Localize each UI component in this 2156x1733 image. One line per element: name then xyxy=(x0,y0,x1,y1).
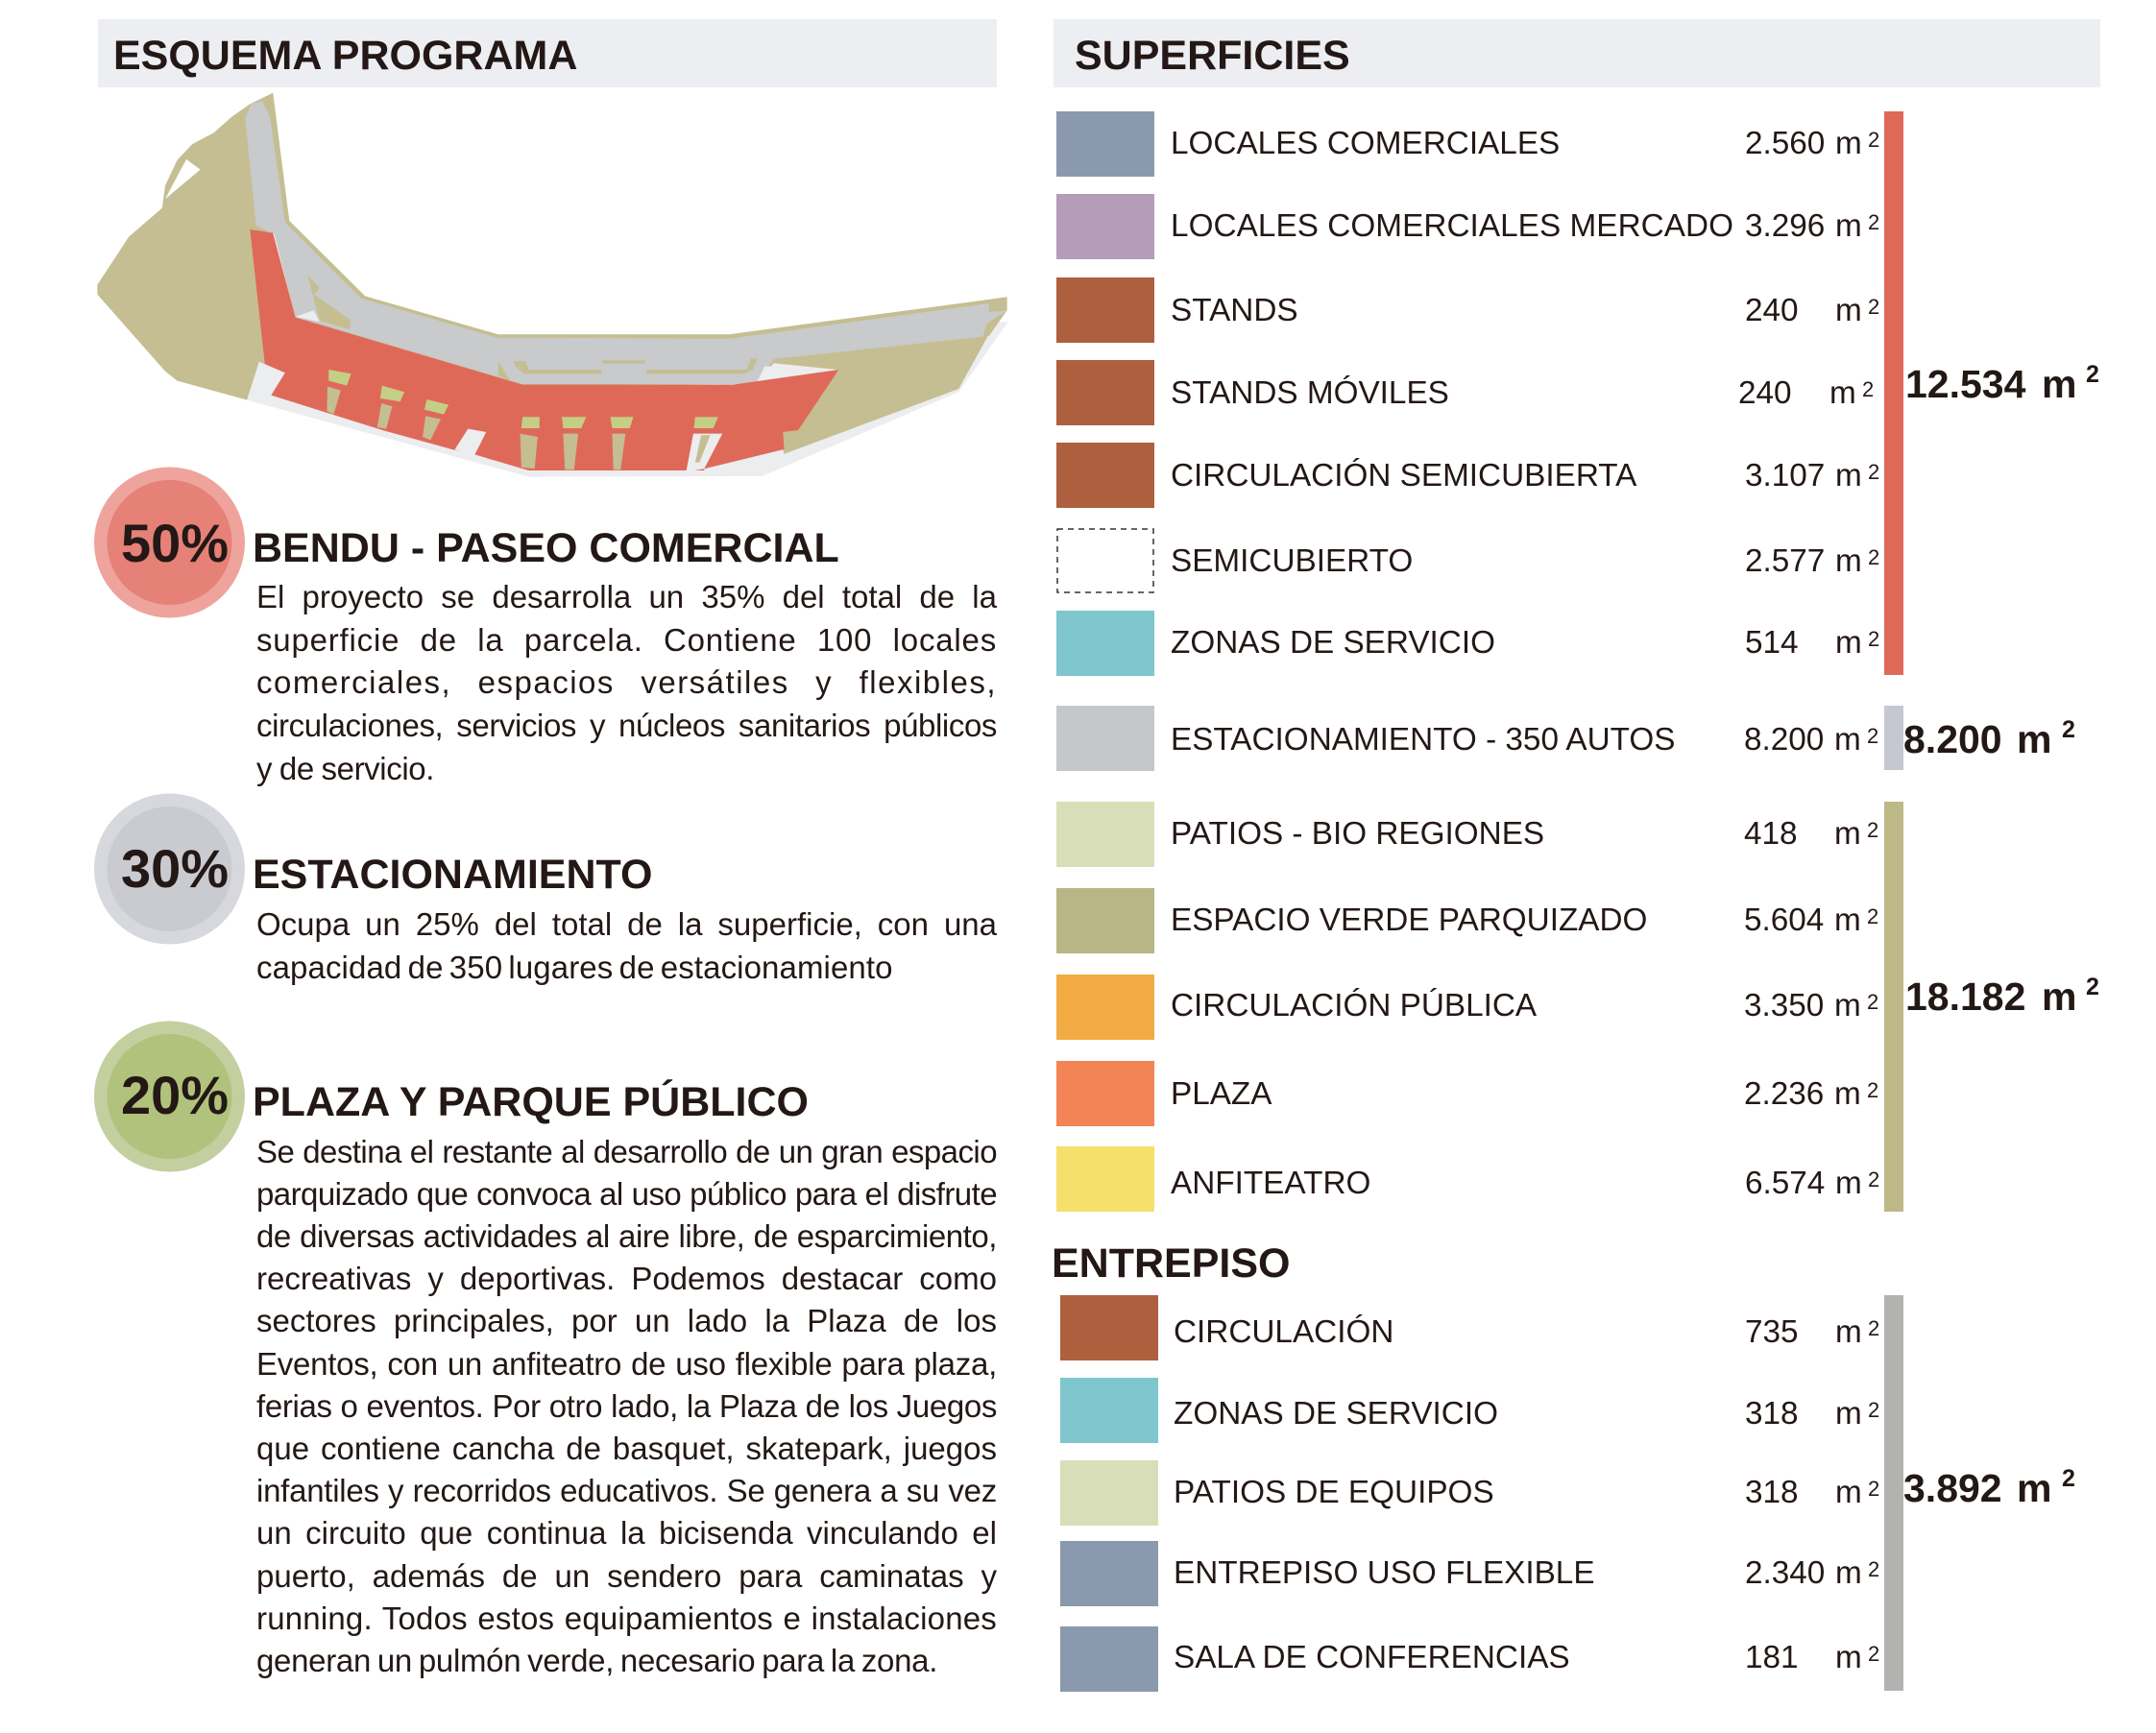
swatch: circulacion semicubierta: m xyxy=(1835,458,1862,493)
swatch: circulacion entrepiso: 735 xyxy=(1745,1314,1799,1350)
swatch: zonas de servicio entrepiso xyxy=(1060,1378,1879,1443)
text: plaza description: running. Todos estos equipamientos e instalaciones xyxy=(256,1601,997,1636)
swatch: circulacion publica xyxy=(1056,975,1878,1040)
swatch: stands moviles: STANDS MÓVILES xyxy=(1171,374,1449,411)
swatch: patios de equipos: PATIOS DE EQUIPOS xyxy=(1174,1475,1494,1510)
swatch: circulacion publica: m xyxy=(1834,988,1861,1023)
text: bendu description: circulaciones, servicios y núcleos sanitarios públicos xyxy=(256,708,997,743)
badge: 50% xyxy=(94,467,245,618)
badge: 50%: 50% xyxy=(121,513,229,573)
swatch: circulacion entrepiso xyxy=(1060,1295,1879,1360)
swatch: patios bio regiones: 418 xyxy=(1744,816,1798,852)
total bar: 12.534 xyxy=(1884,111,2099,675)
total bar: 3.892: 2 xyxy=(2062,1465,2075,1492)
swatch: locales comerciales: m xyxy=(1835,126,1862,161)
swatch: estacionamiento: m xyxy=(1834,722,1861,758)
badge: 30%: 30% xyxy=(121,838,229,899)
swatch: plaza: PLAZA xyxy=(1171,1076,1272,1112)
swatch: sala de conferencias: m xyxy=(1835,1640,1862,1675)
swatch: entrepiso uso flexible: 2 xyxy=(1868,1557,1879,1581)
text: plaza description: Eventos, con un anfiteatro de uso flexible para plaza, xyxy=(256,1346,997,1382)
swatch: locales comerciales mercado: m xyxy=(1835,208,1862,244)
total bar: 3.892 xyxy=(1884,1295,2075,1691)
swatch: estacionamiento: 8.200 xyxy=(1744,722,1824,758)
swatch: circulacion entrepiso: CIRCULACIÓN xyxy=(1174,1313,1393,1350)
swatch: sala de conferencias: 2 xyxy=(1868,1642,1879,1666)
header: superficies: SUPERFICIES xyxy=(1075,33,1350,79)
text: plaza description: generan un pulmón verde, necesario para la zona. xyxy=(256,1643,937,1678)
swatch: zonas de servicio: ZONAS DE SERVICIO xyxy=(1171,625,1495,661)
swatch: patios bio regiones: m xyxy=(1834,816,1861,852)
swatch: circulacion publica: 2 xyxy=(1867,990,1878,1014)
total bar: 8.200: 8.200 xyxy=(1903,717,2002,761)
heading: estacionamiento: ESTACIONAMIENTO xyxy=(253,852,652,898)
swatch: zonas de servicio entrepiso: ZONAS DE SERVICIO xyxy=(1174,1396,1498,1432)
heading: entrepiso: ENTREPISO xyxy=(1052,1240,1291,1287)
total bar: 12.534: m xyxy=(2042,362,2076,406)
text: plaza description: de diversas actividades al aire libre, de esparcimiento, xyxy=(256,1218,997,1254)
swatch: zonas de servicio: 514 xyxy=(1745,625,1799,661)
swatch: stands: 240 xyxy=(1745,293,1799,328)
swatch: entrepiso uso flexible xyxy=(1060,1541,1879,1606)
total bar: 3.892: m xyxy=(2017,1466,2051,1510)
total bar: 8.200 xyxy=(1884,706,2075,770)
text: bendu description: El proyecto se desarrolla un 35% del total de la xyxy=(256,579,997,614)
swatch: circulacion entrepiso: m xyxy=(1835,1314,1862,1350)
swatch: circulacion semicubierta xyxy=(1056,443,1879,508)
swatch: espacio verde parquizado: m xyxy=(1834,903,1861,938)
swatch: stands moviles: 2 xyxy=(1862,377,1874,401)
swatch: estacionamiento: 2 xyxy=(1867,724,1878,748)
swatch: semicubierto: 2 xyxy=(1868,545,1879,569)
text: plaza description: Se destina el restante al desarrollo de un gran espacio xyxy=(256,1133,997,1169)
total bar: 3.892: 3.892 xyxy=(1903,1466,2002,1510)
swatch: stands: STANDS xyxy=(1171,293,1298,328)
swatch: espacio verde parquizado: ESPACIO VERDE PARQUIZADO xyxy=(1171,903,1647,938)
text: bendu description xyxy=(256,579,997,786)
text: estacionamiento description: capacidad de 350 lugares de estacionamiento xyxy=(256,950,893,985)
swatch: espacio verde parquizado: 5.604 xyxy=(1744,903,1824,938)
swatch: entrepiso uso flexible: 2.340 xyxy=(1745,1555,1825,1591)
total bar: 12.534: 2 xyxy=(2086,361,2099,388)
text: plaza description: ferias o eventos. Por otro lado, la Plaza de los Juegos xyxy=(256,1388,997,1424)
swatch: circulacion publica: 3.350 xyxy=(1744,988,1824,1023)
swatch: circulacion semicubierta: CIRCULACIÓN SEMICUBIERTA xyxy=(1171,457,1637,493)
swatch: stands moviles xyxy=(1056,360,1874,425)
swatch: anfiteatro: 6.574 xyxy=(1745,1166,1825,1201)
total bar: 8.200: m xyxy=(2017,717,2051,761)
total bar: 18.182 xyxy=(1884,802,2099,1212)
swatch: patios de equipos: 2 xyxy=(1868,1477,1879,1501)
text: plaza description: recreativas y deportivas. Podemos destacar como xyxy=(256,1261,997,1296)
badge: 30% xyxy=(94,793,245,945)
swatch: zonas de servicio xyxy=(1056,611,1879,676)
total bar: 18.182: 18.182 xyxy=(1905,975,2025,1019)
swatch: semicubierto: 2.577 xyxy=(1745,543,1825,579)
swatch: locales comerciales: LOCALES COMERCIALES xyxy=(1171,126,1560,161)
swatch: locales comerciales: 2 xyxy=(1868,128,1879,152)
text: bendu description: superficie de la parcela. Contiene 100 locales xyxy=(256,622,997,658)
swatch: locales comerciales mercado: 2 xyxy=(1868,210,1879,234)
header: esquema programa: ESQUEMA PROGRAMA xyxy=(113,33,577,79)
swatch: plaza: m xyxy=(1834,1076,1861,1112)
text: plaza description: puerto, además de un sendero para caminatas y xyxy=(256,1558,997,1594)
heading: plaza y parque publico: PLAZA Y PARQUE PÚBLICO xyxy=(253,1078,809,1125)
header: esquema programa xyxy=(98,19,997,87)
swatch: circulacion semicubierta: 3.107 xyxy=(1745,458,1825,493)
swatch: patios bio regiones xyxy=(1056,802,1878,867)
swatch: anfiteatro: ANFITEATRO xyxy=(1171,1166,1370,1201)
swatch: circulacion entrepiso: 2 xyxy=(1868,1316,1879,1340)
swatch: entrepiso uso flexible: m xyxy=(1835,1555,1862,1591)
swatch: locales comerciales mercado xyxy=(1056,194,1879,259)
swatch: sala de conferencias: SALA DE CONFERENCIAS xyxy=(1174,1640,1570,1675)
text: plaza description: que contiene cancha de basquet, skatepark, juegos xyxy=(256,1431,997,1466)
swatch: zonas de servicio entrepiso: 2 xyxy=(1868,1398,1879,1422)
text: plaza description: infantiles y recorridos educativos. Se genera a su vez xyxy=(256,1473,997,1508)
total bar: 12.534: 12.534 xyxy=(1905,362,2026,406)
swatch: plaza: 2 xyxy=(1867,1078,1878,1102)
swatch: locales comerciales xyxy=(1056,111,1879,177)
swatch: patios bio regiones: 2 xyxy=(1867,818,1878,842)
swatch: patios de equipos: 318 xyxy=(1745,1475,1799,1510)
total bar: 18.182: 2 xyxy=(2086,974,2099,1000)
swatch: locales comerciales: 2.560 xyxy=(1745,126,1825,161)
swatch: circulacion publica: CIRCULACIÓN PÚBLICA xyxy=(1171,987,1538,1023)
swatch: plaza: 2.236 xyxy=(1744,1076,1824,1112)
swatch: semicubierto xyxy=(1057,529,1879,592)
swatch: stands: m xyxy=(1835,293,1862,328)
swatch: zonas de servicio entrepiso: m xyxy=(1835,1396,1862,1432)
text: plaza description: sectores principales, por un lado la Plaza de los xyxy=(256,1303,997,1338)
text: bendu description: comerciales, espacios versátiles y flexibles, xyxy=(256,664,997,700)
swatch: locales comerciales mercado: LOCALES COMERCIALES MERCADO xyxy=(1171,208,1733,244)
swatch: espacio verde parquizado xyxy=(1056,888,1878,953)
text: plaza description: un circuito que continua la bicisenda vinculando el xyxy=(256,1515,997,1551)
text: bendu description: y de servicio. xyxy=(256,751,434,786)
swatch: anfiteatro: m xyxy=(1835,1166,1862,1201)
swatch: patios bio regiones: PATIOS - BIO REGIONES xyxy=(1171,816,1544,852)
text: estacionamiento description xyxy=(256,906,997,985)
swatch: stands xyxy=(1056,277,1879,343)
swatch: patios de equipos: m xyxy=(1835,1475,1862,1510)
swatch: zonas de servicio: 2 xyxy=(1868,627,1879,651)
header: superficies xyxy=(1054,19,2100,87)
swatch: zonas de servicio entrepiso: 318 xyxy=(1745,1396,1799,1432)
total bar: 18.182: m xyxy=(2042,975,2076,1019)
swatch: sala de conferencias: 181 xyxy=(1745,1640,1799,1675)
swatch: espacio verde parquizado: 2 xyxy=(1867,904,1878,928)
swatch: zonas de servicio: m xyxy=(1835,625,1862,661)
badge: 20% xyxy=(94,1022,245,1171)
heading: bendu paseo comercial: BENDU - PASEO COMERCIAL xyxy=(253,525,839,571)
swatch: entrepiso uso flexible: ENTREPISO USO FLEXIBLE xyxy=(1174,1555,1595,1591)
swatch: stands moviles: 240 xyxy=(1738,375,1792,411)
swatch: sala de conferencias xyxy=(1060,1626,1879,1692)
swatch: stands moviles: m xyxy=(1829,375,1856,411)
swatch: stands: 2 xyxy=(1868,295,1879,319)
swatch: locales comerciales mercado: 3.296 xyxy=(1745,208,1825,244)
swatch: plaza xyxy=(1056,1061,1878,1126)
site plan diagram xyxy=(97,93,1008,477)
swatch: patios de equipos xyxy=(1060,1460,1879,1526)
swatch: estacionamiento: ESTACIONAMIENTO - 350 AUTOS xyxy=(1171,722,1675,758)
swatch: anfiteatro: 2 xyxy=(1868,1167,1879,1191)
swatch: semicubierto: m xyxy=(1835,543,1862,579)
swatch: estacionamiento xyxy=(1056,706,1878,771)
text: estacionamiento description: Ocupa un 25% del total de la superficie, con una xyxy=(256,906,997,942)
swatch: circulacion semicubierta: 2 xyxy=(1868,460,1879,484)
swatch: anfiteatro xyxy=(1056,1146,1879,1212)
total bar: 8.200: 2 xyxy=(2062,716,2075,743)
badge: 20%: 20% xyxy=(121,1065,229,1125)
swatch: semicubierto: SEMICUBIERTO xyxy=(1171,543,1413,579)
text: plaza description: parquizado que convoca al uso público para el disfrute xyxy=(256,1176,997,1212)
text: plaza description xyxy=(256,1133,997,1678)
